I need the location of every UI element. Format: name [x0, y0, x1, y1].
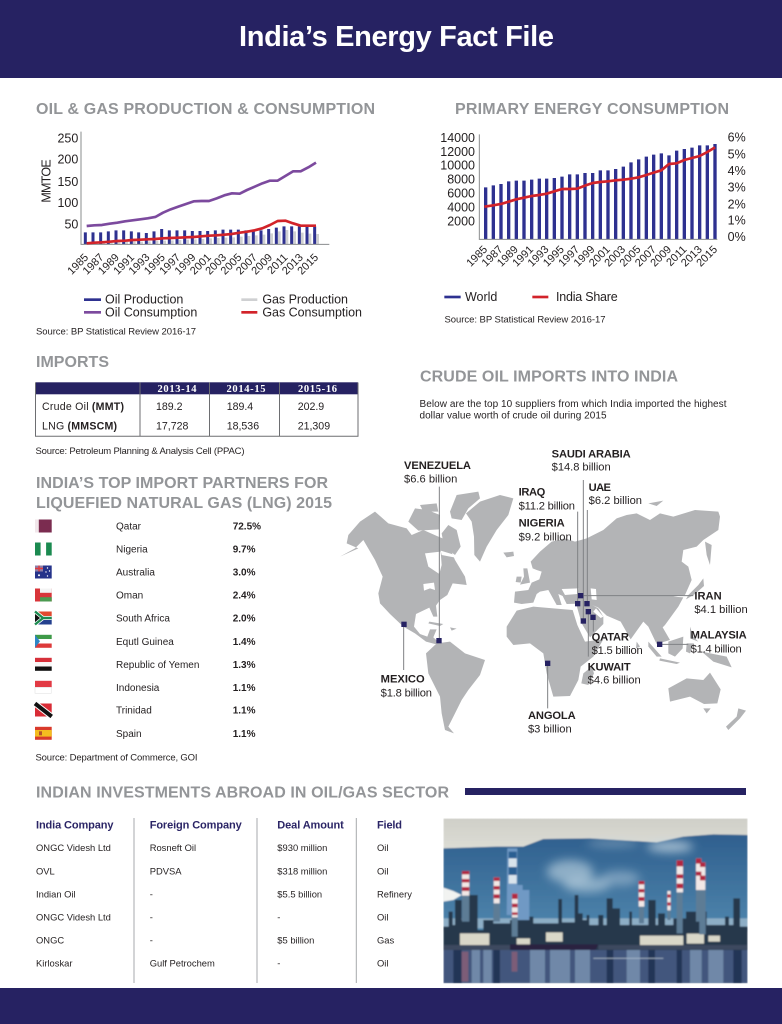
label: Iraq: $11.2 billion: [519, 500, 575, 512]
source: LNG list: Source: Department of Commerce, GOI: [36, 752, 198, 764]
x axis year labels: 2001: [587, 244, 613, 269]
x axis year labels: 2001: [188, 252, 214, 277]
left axis labels: 10000: [440, 159, 475, 173]
heading: primary energy: PRIMARY ENERGY CONSUMPTION: [455, 101, 729, 118]
column: Foreign Company: -: [150, 888, 153, 899]
left axis labels: 12000: [440, 145, 475, 159]
column: Deal Amount: -: [277, 958, 280, 969]
row: Indonesia: Indonesia: [116, 683, 160, 694]
heading: LNG partners: LIQUEFIED NATURAL GAS (LNG) 2015: [36, 495, 332, 512]
legend: India Share: [556, 290, 618, 304]
column: Field: Gas: [377, 935, 395, 946]
table grid: [36, 382, 358, 436]
label: Venezuela: $6.6 billion: [404, 474, 457, 486]
row: South Africa: [35, 612, 256, 624]
label: UAE: UAE: [589, 482, 611, 494]
Arctic islands: [408, 492, 480, 555]
column: Foreign Company: [150, 820, 243, 969]
label: Iran: $4.1 billion: [694, 604, 748, 616]
row: crude oil: 202.9: [298, 401, 324, 413]
x axis year labels: 1997: [556, 244, 582, 269]
column: Foreign Company: Gulf Petrochem: [150, 958, 215, 969]
row: Oman: 2.4%: [233, 590, 256, 602]
x axis year labels: 2005: [219, 252, 244, 277]
label: Saudi Arabia: [552, 448, 631, 474]
x axis year labels: 2003: [203, 252, 229, 277]
column: Deal Amount: $5.5 billion: [277, 888, 322, 899]
investments table: [36, 818, 412, 983]
x axis year labels: 1987: [480, 244, 505, 269]
imports table: 2015-16: [298, 384, 337, 395]
label: Kuwait: $4.6 billion: [588, 675, 641, 687]
column: Field: Oil: [377, 912, 388, 923]
legend: Oil Production: [105, 293, 183, 307]
heading: investments: INDIAN INVESTMENTS ABROAD IN OIL/GAS SECTOR: [36, 784, 449, 802]
inland seas: [423, 551, 603, 618]
source: primary energy chart: Source: BP Statistical Review 2016-17: [444, 314, 606, 326]
x axis year labels: 1991: [111, 252, 137, 277]
column: India Company: India Company: [36, 820, 114, 832]
crude oil description: Below are the top 10 suppliers from which India imported the highest: [420, 399, 727, 410]
column dividers: [134, 818, 356, 983]
Europe and Scandinavia land: [532, 539, 590, 592]
refinery towers: [507, 848, 529, 920]
Greenland: [466, 495, 513, 562]
right axis labels: 1%: [728, 214, 746, 228]
source: imports table: Source: Petroleum Planning & Analysis Cell (PPAC): [36, 446, 244, 457]
label: Nigeria: $9.2 billion: [519, 532, 572, 544]
label: Nigeria: NIGERIA: [519, 518, 565, 530]
y axis labels: 50: [64, 218, 78, 232]
row: crude oil: Crude Oil (MMT): [42, 401, 124, 413]
header band: [0, 0, 782, 78]
footer band: [0, 988, 782, 1024]
title: India’s Energy Fact File: [239, 21, 554, 53]
row: LNG: LNG (MMSCM): [42, 420, 117, 432]
row: South Africa: 2.0%: [233, 614, 256, 624]
heading: imports: IMPORTS: [36, 354, 109, 371]
right axis labels: 6%: [728, 131, 746, 145]
row: South Africa: South Africa: [116, 614, 170, 624]
x axis year labels: 1989: [96, 252, 122, 277]
column: Field: Oil: [377, 958, 388, 969]
x axis year labels: 1985: [65, 252, 91, 277]
row: crude oil: [42, 401, 324, 413]
row: Nigeria: [35, 542, 256, 556]
x axis year labels: 2013: [679, 244, 705, 269]
right axis labels: 5%: [728, 147, 746, 161]
label: Malaysia: $1.4 billion: [691, 644, 742, 656]
row: LNG: 18,536: [227, 420, 259, 432]
row: Nigeria: 9.7%: [233, 544, 256, 556]
column: Foreign Company: PDVSA: [150, 865, 182, 876]
column: Deal Amount: Deal Amount: [277, 820, 344, 832]
x axis year labels: 2009: [249, 252, 275, 277]
row: Trinidad: [35, 704, 256, 716]
heading: oil and gas: OIL & GAS PRODUCTION & CONSUMPTION: [36, 101, 375, 118]
row: LNG: [42, 420, 330, 432]
Arabia: [576, 603, 603, 637]
distant haze: [443, 918, 748, 928]
row: Yemen: Republic of Yemen: [116, 660, 199, 671]
map landmasses: [340, 492, 746, 733]
row: Nigeria: Nigeria: [116, 544, 148, 556]
row: Yemen: 1.3%: [233, 660, 256, 671]
axes: [81, 132, 329, 244]
label: Venezuela: [404, 460, 471, 486]
x axis year labels: 2009: [648, 244, 674, 269]
column: Foreign Company: Rosneft Oil: [150, 842, 196, 853]
supplier markers: [401, 593, 662, 666]
x axis year labels: 2015: [295, 252, 321, 277]
label: Saudi Arabia: $14.8 billion: [552, 462, 611, 474]
x axis year labels: 1999: [572, 244, 597, 269]
storage buildings: [460, 932, 720, 945]
label: Iran: [694, 590, 748, 616]
axes: [479, 134, 717, 239]
x axis year labels: 1987: [81, 252, 106, 277]
heading: LNG partners: [36, 475, 332, 512]
row: Equatorial Guinea: Equtl Guinea: [116, 637, 174, 648]
right axis labels: 4%: [728, 164, 746, 178]
left axis labels: 14000: [440, 131, 475, 145]
label: Kuwait: [588, 661, 641, 687]
column: Field: Oil: [377, 865, 388, 876]
legend: Gas Production: [262, 293, 348, 307]
legend: Gas Consumption: [262, 305, 362, 319]
striped chimneys: [462, 858, 706, 937]
row: LNG: 17,728: [156, 420, 189, 432]
row: Yemen: [35, 658, 256, 671]
imports table: 2014-15: [226, 384, 266, 395]
source: oil and gas chart: Source: BP Statistical Review 2016-17: [36, 326, 196, 338]
column: India Company: Kirloskar: [36, 958, 72, 969]
label: Kuwait: KUWAIT: [588, 661, 631, 673]
row: LNG: 21,309: [298, 420, 330, 432]
column: Foreign Company: -: [150, 912, 153, 923]
sky: [444, 818, 748, 850]
left axis labels: 4000: [447, 200, 475, 214]
row: Indonesia: 1.1%: [233, 683, 256, 694]
oil production bars: [85, 226, 315, 244]
column: Deal Amount: [277, 820, 344, 969]
row: Australia: [35, 566, 256, 578]
label: Malaysia: [691, 630, 747, 656]
smoke plumes: [547, 840, 693, 892]
column: Field: Field: [377, 820, 402, 832]
Southeast Asia islands: [636, 627, 732, 667]
y axis labels: 200: [57, 153, 78, 167]
column: Foreign Company: Foreign Company: [150, 820, 243, 832]
x axis year labels: 2015: [694, 244, 720, 269]
x axis year labels: 1989: [495, 244, 521, 269]
label: Saudi Arabia: SAUDI ARABIA: [552, 448, 631, 460]
world bars: [486, 144, 715, 239]
row: Oman: [35, 588, 256, 602]
table header: [36, 382, 358, 394]
column: Field: Refinery: [377, 888, 412, 899]
x axis year labels: 2011: [265, 252, 290, 277]
crude oil description: [420, 399, 727, 422]
New Zealand: [726, 708, 746, 730]
row: Qatar: 72.5%: [233, 522, 261, 532]
India share line: [484, 147, 715, 207]
x axis year labels: [464, 244, 720, 269]
label: Mexico: [381, 674, 432, 699]
x axis year labels: 1991: [510, 244, 536, 269]
x axis year labels: 1985: [464, 244, 490, 269]
legend: [84, 293, 362, 319]
x axis year labels: 1995: [541, 244, 567, 269]
y axis labels: 250: [57, 132, 78, 146]
column: Field: [377, 820, 412, 969]
chart: primary energy consumption: [440, 131, 746, 304]
right axis labels: 3%: [728, 181, 746, 195]
Madagascar: [581, 667, 594, 685]
label: Angola: ANGOLA: [528, 710, 576, 722]
crude oil description: dollar value worth of crude oil during 2015: [420, 411, 607, 422]
heading: LNG partners: INDIA’S TOP IMPORT PARTNERS FOR: [36, 475, 328, 492]
row: Equatorial Guinea: [35, 635, 256, 648]
x axis year labels: 1993: [526, 244, 551, 269]
oil consumption line: [87, 163, 316, 226]
column: India Company: OVL: [36, 865, 55, 876]
column: India Company: [36, 820, 114, 969]
x axis year labels: [65, 252, 321, 277]
right axis labels: [728, 131, 746, 244]
x axis year labels: 2007: [234, 252, 260, 277]
x axis year labels: 2003: [602, 244, 628, 269]
row: Trinidad: Trinidad: [116, 706, 152, 716]
left axis labels: 8000: [447, 173, 475, 187]
column: Foreign Company: -: [150, 935, 153, 946]
left axis labels: 2000: [447, 214, 475, 228]
left axis labels: 6000: [447, 186, 475, 200]
label: Mexico: $1.8 billion: [381, 687, 432, 699]
right axis labels: 0%: [728, 230, 746, 244]
column: Field: Oil: [377, 842, 388, 853]
x axis year labels: 2011: [664, 244, 689, 269]
label: Qatar: [592, 631, 643, 657]
column: Deal Amount: -: [277, 912, 280, 923]
row: Equatorial Guinea: 1.4%: [233, 637, 256, 648]
column: Deal Amount: $318 million: [277, 865, 327, 876]
x axis year labels: 2007: [633, 244, 659, 269]
label: Angola: [528, 710, 576, 736]
row: Australia: 3.0%: [233, 568, 256, 578]
UK, Ireland, Iceland, Svalbard: [503, 501, 663, 585]
row: Indonesia: [35, 681, 256, 694]
column: Deal Amount: $930 million: [277, 842, 327, 853]
label: UAE: $6.2 billion: [589, 495, 642, 507]
legend: Oil Consumption: [105, 305, 197, 319]
x axis year labels: 2005: [618, 244, 643, 269]
legend: World: [465, 290, 497, 304]
photo: oil refinery by the water: [443, 818, 748, 983]
chart: oil and gas production and consumption: [39, 132, 362, 319]
gas consumption line: [87, 221, 316, 243]
connector lines: [404, 480, 693, 708]
Japan and Kamchatka: [686, 542, 712, 599]
label: Malaysia: MALAYSIA: [691, 630, 747, 642]
row: Australia: Australia: [116, 568, 155, 578]
label: Nigeria: [519, 518, 572, 544]
gas production bars: [88, 230, 318, 244]
x axis year labels: 1993: [127, 252, 152, 277]
label: Qatar: $1.5 billion: [592, 645, 643, 657]
label: Iraq: IRAQ: [519, 487, 546, 499]
x axis year labels: 1999: [173, 252, 198, 277]
row: crude oil: 189.2: [156, 401, 183, 413]
North America: [340, 512, 467, 644]
row: Qatar: [35, 520, 261, 532]
legend: [444, 290, 618, 304]
row: crude oil: 189.4: [227, 401, 253, 413]
y axis labels: 150: [57, 175, 78, 189]
column: Deal Amount: $5 billion: [277, 935, 314, 946]
x axis year labels: 2013: [280, 252, 306, 277]
world map: [340, 448, 748, 736]
Caribbean islands: [428, 622, 457, 631]
Eurasia: [514, 510, 720, 644]
imports table: 2013-14: [158, 384, 197, 395]
Australia: [668, 673, 721, 713]
right axis labels: 2%: [728, 197, 746, 211]
label: Mexico: MEXICO: [381, 674, 425, 686]
row: Spain: 1.1%: [233, 729, 256, 740]
label: Qatar: QATAR: [592, 631, 629, 643]
heading rule: [465, 788, 746, 795]
ship: [510, 944, 598, 951]
left axis labels: [440, 131, 475, 228]
imports table: [36, 382, 358, 436]
label: Angola: $3 billion: [528, 724, 572, 736]
x axis year labels: 1995: [142, 252, 168, 277]
y axis labels: [57, 132, 78, 232]
row: Spain: Spain: [116, 729, 142, 740]
y axis labels: 100: [57, 196, 78, 210]
y axis title: MMTOE: [39, 159, 53, 203]
label: Iraq: [519, 487, 575, 512]
row: Qatar: Qatar: [116, 522, 142, 532]
column: India Company: Indian Oil: [36, 888, 76, 899]
LNG partners list: [35, 520, 261, 740]
shoreline skyline: [443, 893, 748, 950]
x axis year labels: 1997: [157, 252, 183, 277]
label: UAE: [589, 482, 642, 507]
row: Oman: Oman: [116, 590, 143, 602]
Africa: [507, 607, 603, 697]
column: India Company: ONGC Videsh Ltd: [36, 842, 111, 853]
column: India Company: ONGC: [36, 935, 64, 946]
label: Venezuela: VENEZUELA: [404, 460, 471, 472]
mountains: [443, 834, 748, 932]
water with reflections: [443, 950, 748, 983]
label: Iran: IRAN: [694, 590, 722, 602]
row: Trinidad: 1.1%: [233, 706, 256, 716]
heading: crude oil imports: CRUDE OIL IMPORTS INTO INDIA: [420, 369, 678, 386]
South America: [426, 642, 485, 733]
column: India Company: ONGC Videsh Ltd: [36, 912, 111, 923]
row: Spain: [35, 727, 256, 740]
